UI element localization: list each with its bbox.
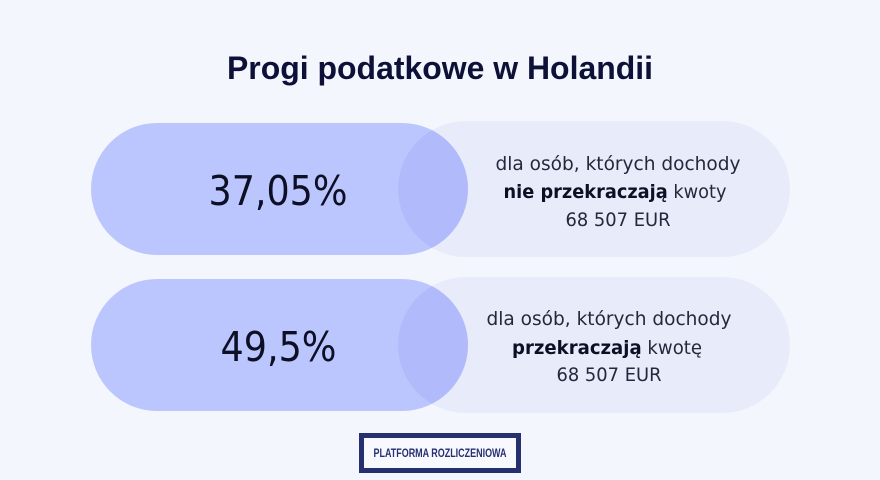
rate pill <box>91 279 468 411</box>
panel: first tax threshold <box>91 121 790 257</box>
description text <box>486 308 732 386</box>
title: Progi podatkowe w Holandii <box>227 50 653 86</box>
description pill background <box>398 277 790 413</box>
description text: 68 507 EUR <box>556 364 662 386</box>
rate value: 37,05% <box>208 167 348 215</box>
description text: dla osób, których dochody <box>486 308 732 330</box>
rate value: 49,5% <box>220 323 336 371</box>
panel: second tax threshold <box>91 277 790 413</box>
pill overlap <box>398 286 468 404</box>
description text <box>496 153 740 231</box>
description text: nie przekraczają kwoty <box>504 181 726 203</box>
description pill background <box>398 121 790 257</box>
logo: Platforma Rozliczeniowa <box>362 436 518 470</box>
description text: dla osób, których dochody <box>496 153 740 175</box>
logo: Platforma Rozliczeniowa: PLATFORMA ROZLICZENIOWA <box>374 446 507 460</box>
description text: przekraczają kwotę <box>512 337 702 359</box>
pill overlap <box>398 130 468 248</box>
rate pill <box>91 123 468 255</box>
description text: 68 507 EUR <box>566 209 670 231</box>
